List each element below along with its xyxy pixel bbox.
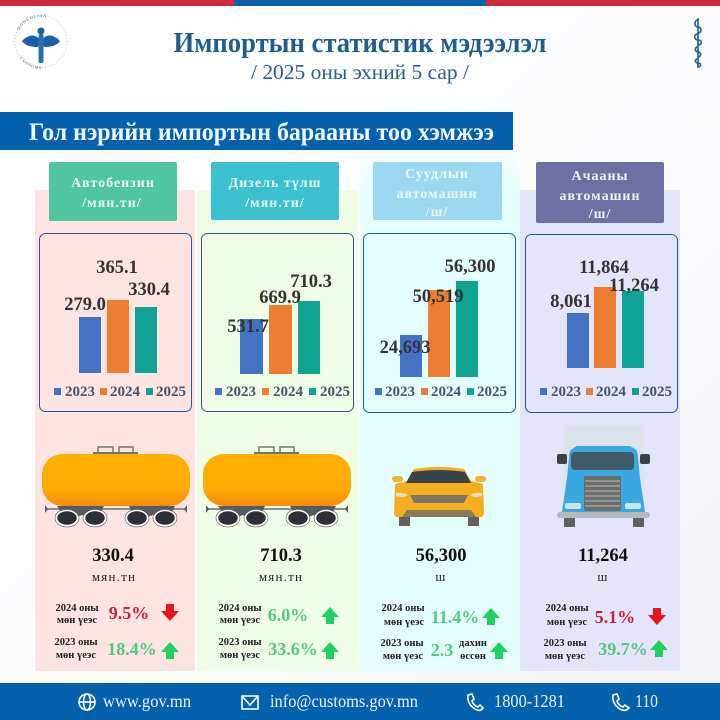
bar chart: passenger cars: 50,519 bbox=[413, 287, 463, 307]
icon: Mongolian script emblem bbox=[695, 18, 701, 68]
header: diesel: Дизель түлш bbox=[229, 176, 321, 191]
total: trucks: ш bbox=[597, 569, 609, 584]
bar chart: diesel: 710.3 bbox=[290, 272, 332, 292]
bar chart: trucks: 2023 bbox=[551, 384, 581, 400]
header: trucks bbox=[536, 162, 664, 223]
total: trucks bbox=[578, 546, 628, 584]
bar chart: diesel: 2023 bbox=[226, 384, 256, 400]
icon: envelope bbox=[242, 696, 258, 709]
total: trucks: 11,264 bbox=[578, 546, 628, 566]
comparison: diesel: мөн үеэс bbox=[220, 650, 260, 661]
bar chart: gasoline: 365.1 bbox=[96, 258, 138, 278]
header: gasoline: Автобензин bbox=[71, 176, 155, 191]
bar chart: trucks: 8,061 bbox=[550, 292, 592, 312]
comparison: trucks: 5.1% bbox=[595, 607, 635, 627]
comparison: passenger cars: 2.3 bbox=[431, 640, 453, 660]
icon: phone bbox=[613, 694, 629, 710]
total: diesel bbox=[259, 546, 303, 584]
comparison: diesel: 2024 оны bbox=[218, 603, 262, 614]
icon: phone bbox=[468, 694, 483, 710]
total: gasoline: 330.4 bbox=[92, 546, 134, 566]
comparison: passenger cars: мөн үеэс bbox=[384, 617, 424, 628]
header: passenger cars: автомашин bbox=[396, 187, 478, 202]
comparison: passenger cars: 2024 оны bbox=[381, 603, 425, 614]
bar chart: gasoline bbox=[40, 234, 192, 412]
icon: yellow car bbox=[392, 467, 486, 526]
comparison: gasoline: 2023 оны bbox=[54, 637, 98, 648]
comparison: diesel: 2023 оны bbox=[218, 637, 262, 648]
bar chart: trucks: 11,864 bbox=[579, 258, 629, 278]
bar chart: passenger cars: 24,693 bbox=[380, 338, 430, 358]
header: gasoline: /мян.тн/ bbox=[81, 196, 142, 211]
comparison: passenger cars: 11.4% bbox=[431, 607, 479, 627]
header: trucks: автомашин bbox=[559, 189, 641, 204]
header: diesel bbox=[211, 162, 339, 220]
comparison: gasoline: мөн үеэс bbox=[56, 650, 96, 661]
bar chart: trucks: 11,264 bbox=[609, 276, 659, 296]
panel: trucks bbox=[520, 162, 680, 671]
comparison: passenger cars: мөн үеэс bbox=[383, 651, 423, 662]
comparison: gasoline: 9.5% bbox=[109, 603, 149, 623]
total: passenger cars: 56,300 bbox=[416, 546, 466, 566]
phone number: 1800-1281 bbox=[494, 691, 565, 711]
comparison: trucks: 2023 оны bbox=[543, 638, 587, 649]
comparison: trucks: мөн үеэс bbox=[545, 651, 585, 662]
comparison: passenger cars bbox=[380, 603, 508, 662]
bar chart: diesel bbox=[202, 234, 354, 412]
total: diesel: 710.3 bbox=[260, 546, 302, 566]
section banner: Гол нэрийн импортын барааны тоо хэмжээ bbox=[29, 119, 494, 146]
bar chart: trucks bbox=[526, 234, 678, 412]
bar chart: gasoline: 2025 bbox=[156, 384, 186, 400]
panel: diesel bbox=[197, 162, 358, 671]
comparison: gasoline: мөн үеэс bbox=[57, 615, 97, 626]
comparison: diesel: 33.6% bbox=[268, 639, 318, 659]
hotline: 110 bbox=[635, 691, 658, 711]
total: diesel: мян.тн bbox=[259, 569, 303, 584]
header: passenger cars: /ш/ bbox=[425, 205, 448, 220]
comparison: diesel bbox=[218, 603, 339, 661]
bar chart: passenger cars: 2023 bbox=[385, 384, 415, 400]
icon: tanker wagon bbox=[42, 447, 190, 527]
header: trucks: /ш/ bbox=[588, 207, 611, 222]
comparison: trucks: мөн үеэс bbox=[547, 617, 587, 628]
header: trucks: Ачааны bbox=[571, 169, 629, 184]
title: Импортын статистик мэдээлэл bbox=[174, 28, 546, 59]
bar chart: diesel: 2024 bbox=[273, 384, 304, 400]
icon: tanker wagon bbox=[203, 447, 351, 527]
icon: blue truck bbox=[557, 425, 650, 527]
bar chart: trucks: 2024 bbox=[596, 384, 626, 400]
section banner bbox=[0, 112, 513, 150]
total: gasoline bbox=[92, 546, 136, 584]
bar chart: passenger cars: 2024 bbox=[431, 384, 462, 400]
bar chart: passenger cars: 56,300 bbox=[445, 257, 495, 277]
bar chart: passenger cars bbox=[364, 234, 516, 412]
total: passenger cars bbox=[416, 546, 466, 584]
email: info@customs.gov.mn bbox=[270, 691, 418, 711]
bar chart: gasoline: 2023 bbox=[65, 384, 95, 400]
bar chart: diesel: 2025 bbox=[320, 384, 350, 400]
bar chart: gasoline: 279.0 bbox=[64, 295, 106, 315]
bar chart: passenger cars: 2025 bbox=[477, 384, 507, 400]
panel: passenger cars bbox=[360, 152, 520, 671]
logo: customs emblem: MONGOLIAN bbox=[16, 14, 46, 31]
bar chart: gasoline: 2024 bbox=[110, 384, 140, 400]
bar chart: trucks: 2025 bbox=[642, 384, 672, 400]
total: passenger cars: ш bbox=[435, 569, 447, 584]
comparison: passenger cars: 2023 оны bbox=[380, 638, 424, 649]
top stripe bbox=[0, 0, 720, 6]
comparison: gasoline bbox=[54, 603, 179, 661]
logo: customs emblem bbox=[14, 14, 68, 70]
bar chart: diesel: 531.7 bbox=[227, 317, 269, 337]
comparison: trucks: 2024 оны bbox=[545, 603, 589, 614]
comparison: passenger cars: өссөн bbox=[460, 651, 486, 662]
subtitle: / 2025 оны эхний 5 сар / bbox=[251, 60, 469, 84]
header: passenger cars: Суудлын bbox=[405, 167, 469, 182]
footer bbox=[0, 683, 720, 720]
comparison: trucks bbox=[543, 603, 668, 662]
bar chart: diesel: 669.9 bbox=[259, 288, 301, 308]
logo: customs emblem: CUSTOMS bbox=[20, 57, 41, 70]
comparison: diesel: 6.0% bbox=[268, 605, 308, 625]
header: diesel: /мян.тн/ bbox=[244, 196, 305, 211]
total: gasoline: мян.тн bbox=[92, 569, 136, 584]
comparison: gasoline: 18.4% bbox=[107, 639, 157, 659]
comparison: diesel: мөн үеэс bbox=[220, 615, 260, 626]
comparison: gasoline: 2024 оны bbox=[55, 603, 99, 614]
bar chart: gasoline: 330.4 bbox=[128, 280, 170, 300]
header: gasoline bbox=[49, 162, 177, 221]
comparison: passenger cars: дахин bbox=[459, 638, 487, 649]
website: www.gov.mn bbox=[103, 691, 191, 711]
comparison: trucks: 39.7% bbox=[598, 639, 648, 659]
header: passenger cars bbox=[373, 162, 502, 220]
icon: globe bbox=[79, 694, 95, 710]
panel: gasoline bbox=[35, 162, 195, 671]
